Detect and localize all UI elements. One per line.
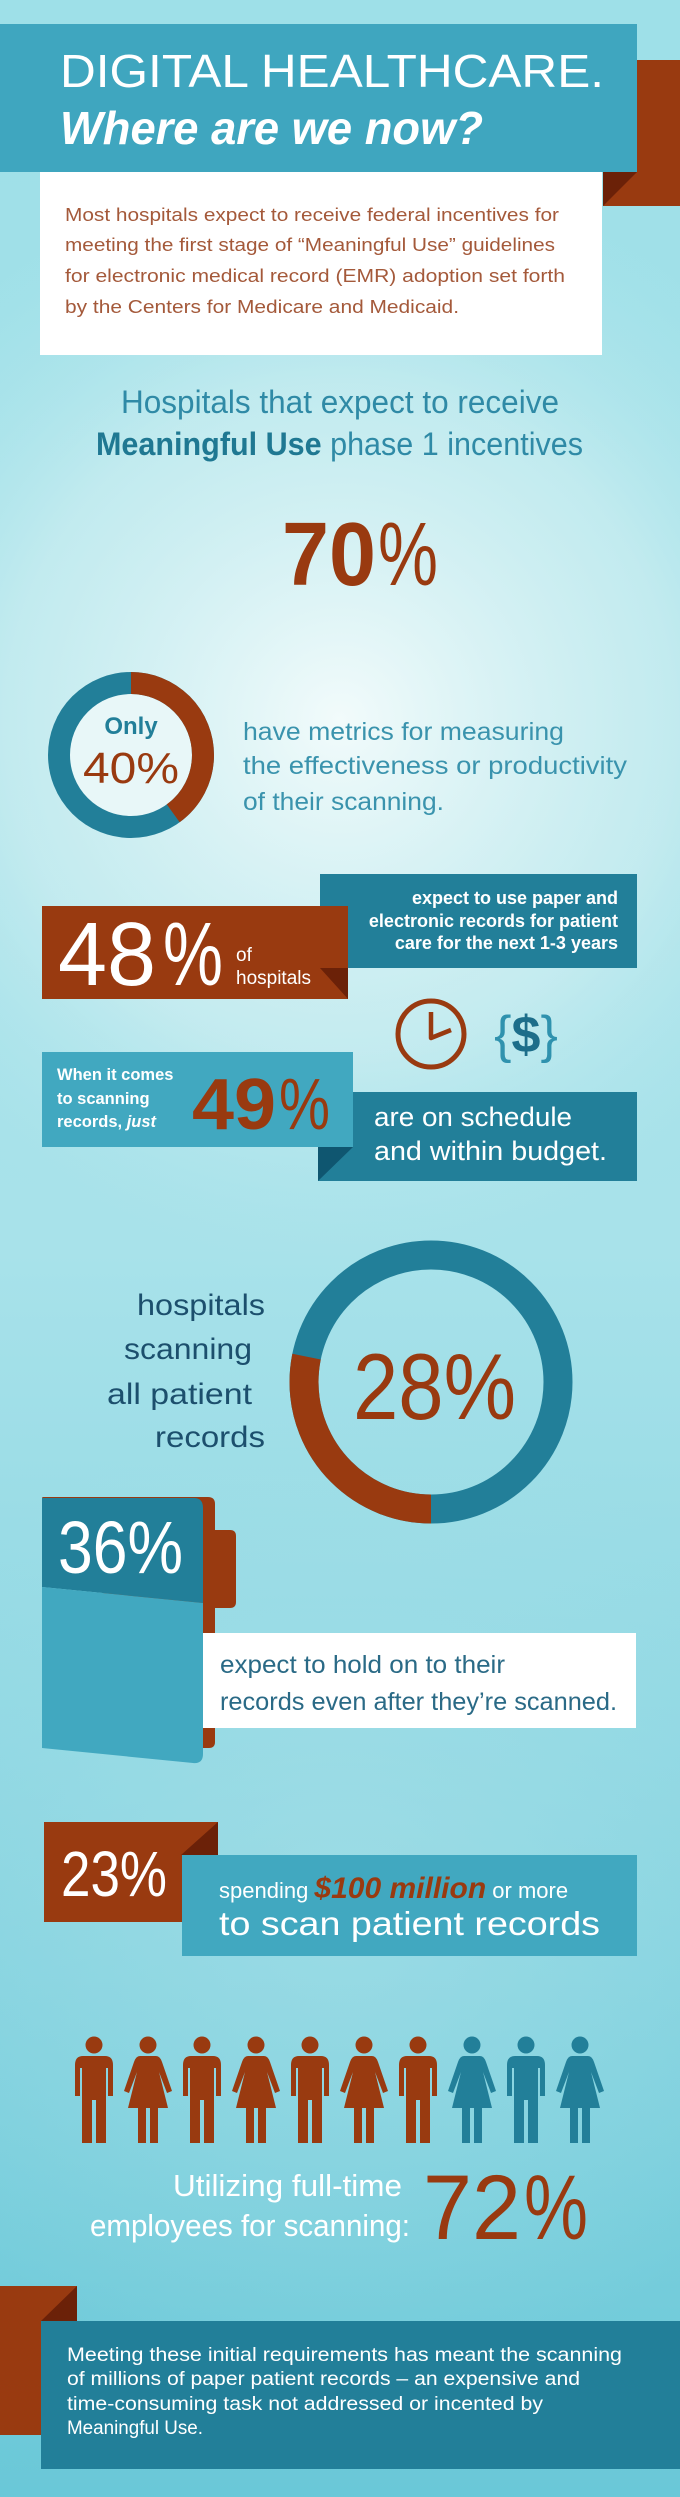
stat 70%: % bbox=[378, 505, 438, 605]
stat 72%: employees for scanning: bbox=[90, 2208, 410, 2243]
panel: 49%: and within budget. bbox=[374, 1136, 607, 1166]
text: hospitals scanning: all patient bbox=[107, 1378, 253, 1411]
panel: 49%: When it comes bbox=[57, 1066, 173, 1084]
text: hospitals scanning: hospitals bbox=[137, 1289, 265, 1322]
panel: 49%: are on schedule bbox=[374, 1102, 572, 1132]
donut 28%: 28% bbox=[353, 1334, 516, 1439]
panel: 48%: 48 bbox=[58, 905, 156, 1005]
text: hospitals scanning bbox=[107, 1289, 265, 1454]
panel: 23%: spending $100 million or more bbox=[219, 1872, 568, 1905]
intro text box: by the Centers for Medicare and Medicaid. bbox=[65, 297, 459, 317]
icon: budget: {$} bbox=[494, 1006, 558, 1064]
panel: 23% bbox=[44, 1822, 637, 1956]
panel: 48% bbox=[42, 874, 637, 1005]
text: metrics: have metrics for measuring bbox=[243, 718, 564, 746]
title ribbon bbox=[0, 24, 680, 206]
donut 40%: Only bbox=[104, 713, 158, 740]
text: metrics: of their scanning. bbox=[243, 788, 444, 816]
panel: 48%: of bbox=[236, 945, 253, 966]
icon: folder 36%: 36% bbox=[58, 1506, 183, 1589]
text: hospitals scanning: records bbox=[155, 1421, 265, 1454]
panel: 48%: care for the next 1-3 years bbox=[395, 933, 618, 953]
panel: 23%: 23% bbox=[61, 1838, 167, 1910]
icon: folder 36% bbox=[42, 1497, 236, 1763]
panel: 48%: electronic records for patient bbox=[369, 911, 618, 931]
footer callout: Meeting these initial requirements has meant the scanning bbox=[67, 2345, 622, 2366]
panel: 49% bbox=[42, 1052, 637, 1181]
footer callout bbox=[0, 2286, 680, 2469]
intro text box: meeting the first stage of “Meaningful Use” guidelines bbox=[65, 235, 555, 255]
heading: meaningful use: Hospitals that expect to receive bbox=[121, 384, 559, 420]
footer callout: time-consuming task not addressed or incented by bbox=[67, 2394, 544, 2415]
intro text box: Most hospitals expect to receive federal incentives for bbox=[65, 205, 559, 225]
text: hospitals scanning: scanning bbox=[124, 1333, 252, 1366]
stat 70%: 70 bbox=[282, 505, 376, 605]
stat 70% bbox=[282, 505, 438, 605]
intro text box bbox=[40, 172, 602, 355]
callout: hold records: records even after they’re scanned. bbox=[220, 1688, 617, 1716]
panel: 49%: % bbox=[279, 1065, 330, 1145]
panel: 48%: % bbox=[163, 905, 223, 1005]
callout: hold records bbox=[203, 1633, 636, 1728]
footer callout: Meaningful Use. bbox=[67, 2418, 203, 2439]
title: Where are we now? bbox=[60, 102, 483, 154]
donut 28% bbox=[304, 1255, 558, 1509]
footer callout: of millions of paper patient records – an expensive and bbox=[67, 2369, 580, 2390]
text: metrics: the effectiveness or productivity bbox=[243, 752, 628, 780]
stat 72%: % bbox=[524, 2157, 588, 2259]
stat 72%: 72 bbox=[423, 2157, 521, 2259]
heading: meaningful use bbox=[96, 384, 583, 462]
panel: 49%: records, just bbox=[57, 1113, 158, 1131]
callout: hold records: expect to hold on to their bbox=[220, 1651, 505, 1679]
heading: meaningful use: Meaningful Use phase 1 incentives bbox=[96, 426, 583, 462]
stat 72%: Utilizing full-time bbox=[173, 2168, 402, 2203]
donut 40%: 40% bbox=[83, 744, 179, 793]
intro text box: for electronic medical record (EMR) adoption set forth bbox=[65, 266, 565, 286]
panel: 48%: expect to use paper and bbox=[412, 888, 618, 908]
panel: 49%: to scanning bbox=[57, 1090, 150, 1108]
icon: clock bbox=[398, 1001, 464, 1067]
text: metrics bbox=[243, 718, 628, 816]
panel: 23%: to scan patient records bbox=[219, 1905, 600, 1942]
panel: 49%: 49 bbox=[192, 1065, 276, 1145]
donut 40% bbox=[59, 683, 203, 827]
title: DIGITAL HEALTHCARE. bbox=[60, 45, 604, 97]
stat 72% bbox=[90, 2157, 588, 2259]
chart: people icons bbox=[75, 2036, 604, 2143]
title bbox=[60, 45, 604, 154]
panel: 48%: hospitals bbox=[236, 968, 311, 989]
